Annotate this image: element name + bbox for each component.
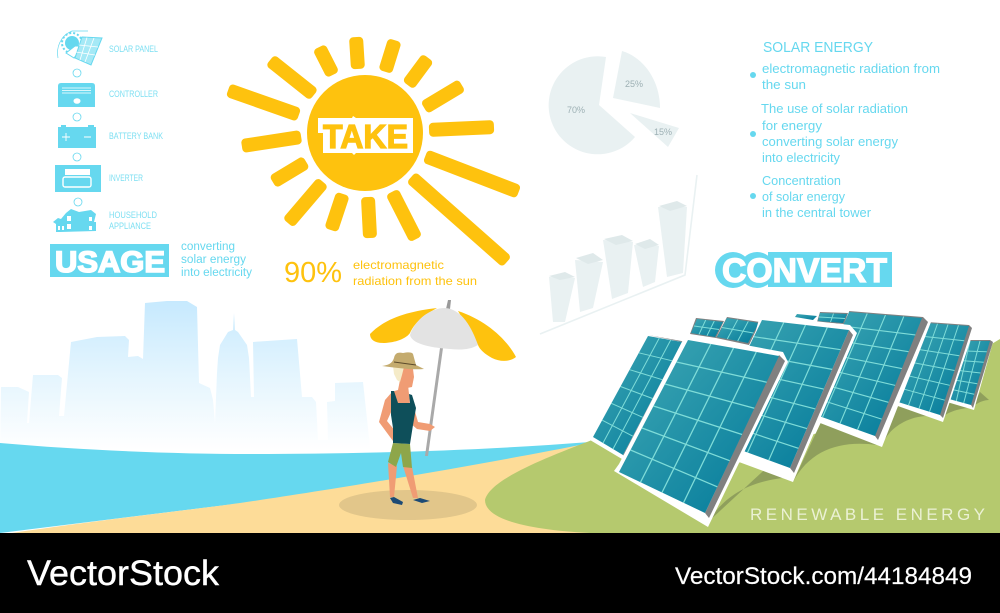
neck [391, 380, 410, 404]
connector circle [73, 153, 81, 161]
pie chart: 15% [654, 127, 672, 137]
sun rays [226, 37, 521, 267]
hat [382, 352, 424, 369]
icon: inverter [55, 165, 101, 192]
90 percent stat: radiation from the sun [353, 274, 477, 288]
label: battery bank: BATTERY BANK [109, 131, 163, 141]
solar panel: right [895, 322, 974, 422]
90 percent stat [284, 257, 477, 289]
person shadow on sand [339, 490, 477, 520]
bullet one [750, 61, 940, 92]
solar panel: small back G [690, 318, 724, 338]
usage description: solar energy [181, 254, 246, 266]
usage description [181, 241, 252, 279]
head [397, 367, 414, 388]
connector circle [73, 69, 81, 77]
solar panel: front [614, 334, 788, 527]
icon: house [53, 209, 96, 232]
usage flow [53, 31, 163, 232]
solar panel: second row [705, 315, 857, 482]
green hill [485, 339, 1000, 533]
bullet one: electromagnetic radiation from [762, 61, 940, 76]
bar 4 [634, 239, 659, 287]
sandals [390, 497, 430, 505]
bullet two: for energy [762, 118, 822, 133]
bar 3 [603, 235, 633, 299]
connector circle [73, 113, 81, 121]
right arm [410, 408, 435, 431]
left arm [379, 392, 400, 442]
pie chart: 25% [625, 79, 643, 89]
bullet two [750, 101, 908, 165]
label: household appliance [109, 210, 157, 231]
usage description: into electricity [181, 267, 252, 279]
beach sand [12, 443, 640, 533]
pie chart [549, 51, 679, 154]
solar energy text block [750, 39, 940, 220]
icon: solar panel [58, 31, 102, 65]
bullet two: The use of solar radiation [761, 101, 908, 116]
legs [388, 463, 418, 498]
usage description: converting [181, 241, 235, 253]
solar panel: center right [805, 311, 931, 447]
convert badge: CONVERT [722, 252, 887, 290]
90 percent stat: 90% [284, 257, 342, 289]
bullet three: in the central tower [762, 205, 872, 220]
heading: SOLAR ENERGY [763, 39, 873, 56]
solar panel: far right [947, 340, 993, 410]
person with umbrella [370, 300, 516, 505]
city skyline [0, 301, 370, 460]
bullet three [750, 173, 872, 220]
footer image id: VectorStock.com/44184849 [675, 563, 972, 590]
bar 2 [575, 253, 603, 312]
footer logo: VectorStock [27, 554, 220, 593]
pie chart: 70% [567, 105, 585, 115]
connector circle [74, 198, 82, 206]
solar panel: small far back J [817, 312, 848, 324]
solar panel array [590, 311, 993, 527]
solar panel: small back H [716, 317, 760, 345]
bullet three: Concentration [762, 173, 841, 188]
growth bar chart [540, 175, 697, 334]
label: controller: CONTROLLER [109, 89, 158, 99]
sea [0, 442, 590, 533]
TAKE label: TAKE [323, 118, 408, 155]
bullet two: converting solar energy [762, 134, 898, 149]
solar panel: small far back I [795, 314, 817, 320]
solar panel: left back [590, 334, 687, 462]
shorts [388, 443, 412, 468]
icon: battery [58, 125, 96, 148]
renewable energy caption: RENEWABLE ENERGY [750, 505, 985, 524]
tank top [391, 391, 416, 444]
footer bar [0, 533, 1000, 613]
label: solar panel: SOLAR PANEL [109, 44, 158, 54]
label: household appliance: HOUSEHOLD [109, 210, 157, 220]
bullet three: of solar energy [762, 189, 845, 204]
panel shadows on hill [708, 392, 989, 522]
bar 1 [549, 272, 575, 322]
sun disc with TAKE [307, 75, 423, 191]
label: inverter: INVERTER [109, 173, 143, 183]
chart axes [540, 175, 697, 334]
bullet one: the sun [762, 77, 806, 92]
icon: controller [58, 83, 95, 107]
90 percent stat: electromagnetic [353, 258, 444, 272]
usage badge: USAGE [55, 246, 165, 279]
bullet two: into electricity [762, 150, 840, 165]
umbrella [370, 300, 516, 456]
hair [393, 366, 404, 382]
bar 5 [658, 201, 687, 277]
label: household appliance: APPLIANCE [109, 221, 151, 231]
